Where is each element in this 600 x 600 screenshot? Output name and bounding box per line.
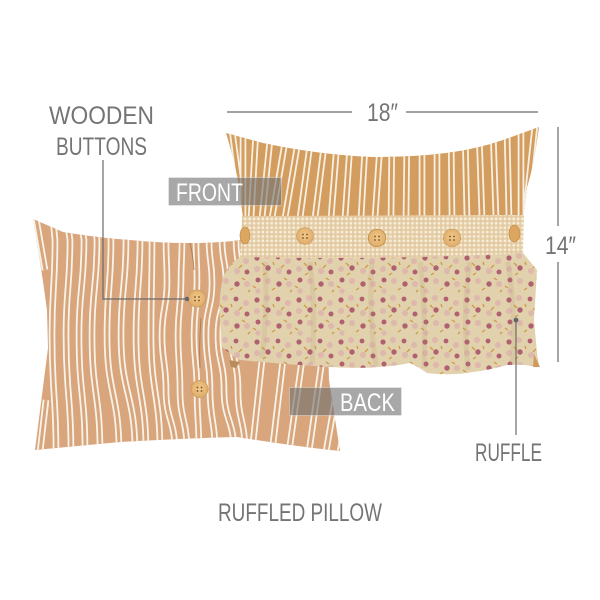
icon: front button far left (240, 227, 250, 244)
title: ruffled pillow: RUFFLED PILLOW (218, 499, 382, 527)
icon: front button 2 (296, 228, 314, 244)
label: back: BACK (340, 389, 395, 417)
label: back (290, 388, 402, 417)
icon: lower back button (191, 380, 208, 398)
icon: upper back button (188, 290, 206, 307)
panel: back pillow (33, 218, 356, 452)
callout: ruffle (475, 318, 542, 467)
floral ruffle (219, 253, 539, 374)
icon: front button 4 (443, 229, 461, 247)
callout: wooden buttons: WOODEN (49, 102, 154, 130)
callout: wooden buttons: BUTTONS (56, 133, 147, 161)
callout: wooden buttons (49, 102, 189, 301)
callout: ruffle: RUFFLE (475, 439, 542, 467)
infographic: ruffled pillow (33, 103, 576, 521)
panel: front pillow (219, 125, 540, 374)
ruffle folds (262, 262, 513, 370)
seam between buttons (190, 243, 201, 368)
icon: front button far right (509, 225, 520, 242)
icon: front button 3 (368, 229, 386, 247)
dimension: height 14 inches: 14″ (545, 232, 576, 260)
label: front: FRONT (176, 179, 243, 207)
ruffle corner flap left (229, 360, 240, 368)
gingham band (240, 215, 524, 259)
ruffle corner flap right (533, 354, 540, 367)
dimension: width 18 inches: 18″ (367, 99, 398, 127)
